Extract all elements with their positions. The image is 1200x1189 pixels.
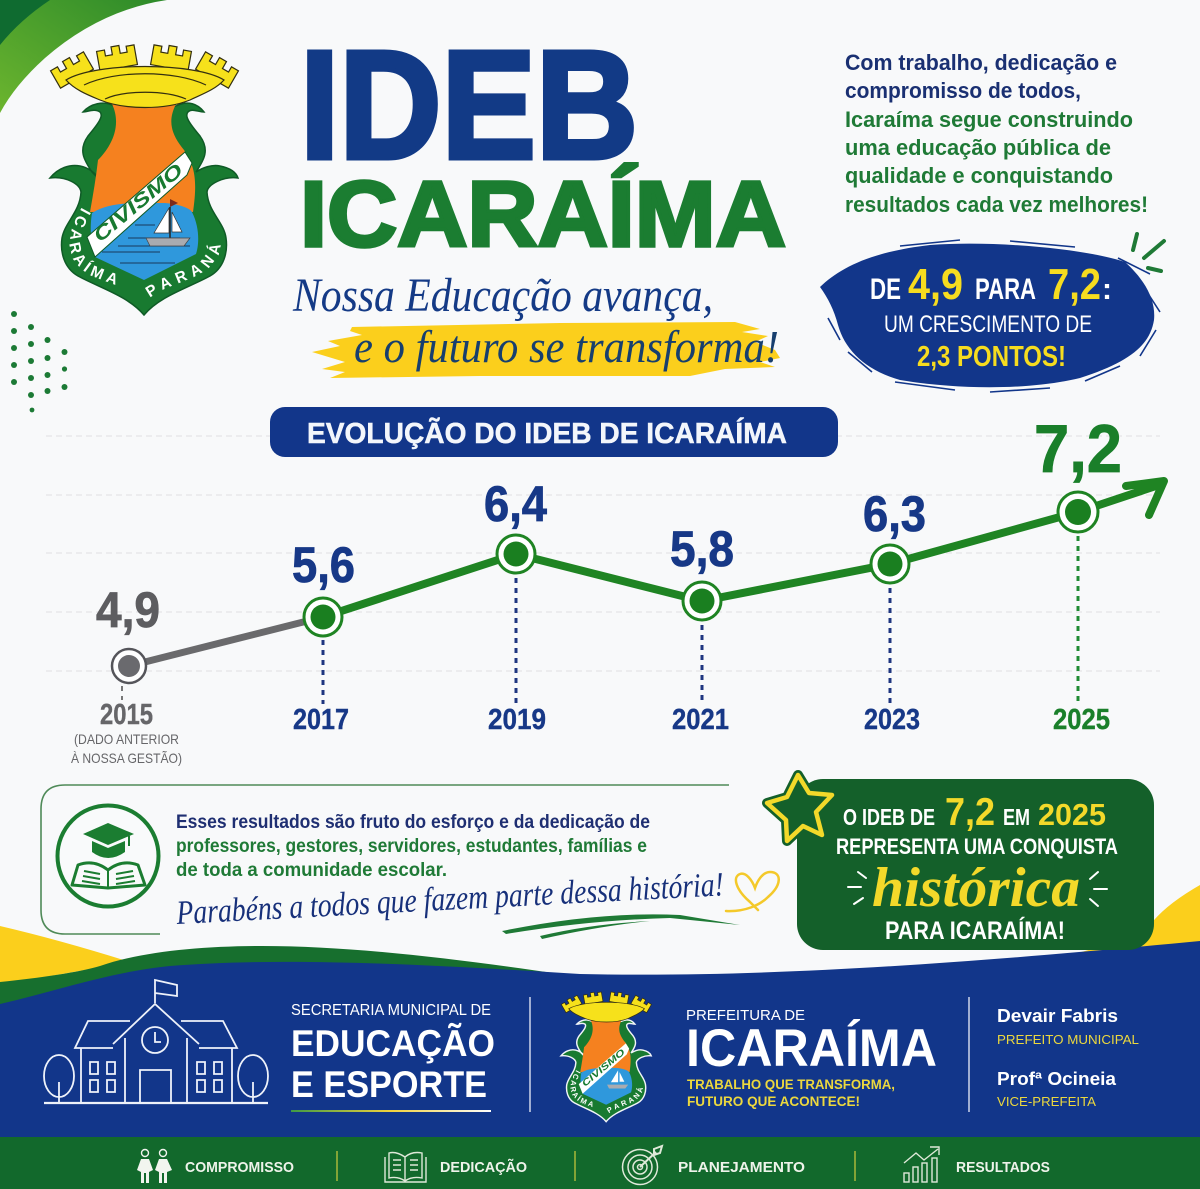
growth callout blob: 2,3 PONTOS! — [917, 341, 1066, 373]
callout accent rays — [1133, 234, 1164, 271]
growth callout blob: UM CRESCIMENTO DE — [884, 311, 1092, 338]
values bar — [0, 1137, 1200, 1189]
chart grid — [46, 436, 1160, 671]
growth callout blob — [820, 240, 1160, 392]
officials: VICE-PREFEITA — [997, 1094, 1096, 1109]
intro paragraph: uma educação pública de — [845, 135, 1111, 160]
message panel — [41, 785, 779, 939]
bottom yellow swooshes — [0, 885, 1200, 985]
year labels: 2019 — [488, 704, 546, 736]
2015 note — [71, 731, 182, 766]
title — [300, 19, 786, 266]
achievement text — [836, 791, 1118, 945]
congratulation script: Parabéns a todos que fazem parte dessa história! — [175, 866, 725, 932]
year labels: 2025 — [1053, 704, 1110, 736]
icon: target — [622, 1146, 662, 1184]
achievement text: EM — [1003, 804, 1030, 830]
year drop lines — [122, 536, 1078, 704]
prefecture name: TRABALHO QUE TRANSFORMA, — [687, 1077, 895, 1092]
line chart — [71, 411, 1164, 766]
officials: PREFEITO MUNICIPAL — [997, 1032, 1139, 1047]
decorative dot pattern — [11, 311, 68, 412]
icon: star — [767, 775, 832, 841]
message text: de toda a comunidade escolar. — [176, 860, 447, 881]
achievement text: O IDEB DE — [843, 804, 935, 830]
small crest: PARANÁ — [606, 1088, 643, 1113]
intro paragraph: qualidade e conquistando — [845, 163, 1113, 188]
year labels: 2017 — [293, 704, 349, 736]
crest ribbon name right — [150, 226, 221, 298]
value labels: 4,9 — [96, 582, 160, 638]
prefecture name: FUTURO QUE ACONTECE! — [687, 1094, 860, 1109]
2015 note: (DADO ANTERIOR — [74, 731, 179, 747]
intro paragraph — [845, 50, 1148, 217]
prefecture name: ICARAÍMA — [686, 1018, 937, 1078]
icon: open book — [385, 1152, 426, 1182]
message text — [176, 812, 650, 881]
label dedicacao: DEDICAÇÃO — [440, 1158, 527, 1176]
small crest — [559, 992, 652, 1123]
point 2019 — [497, 535, 535, 573]
value labels: 5,6 — [292, 537, 355, 593]
value labels: 7,2 — [1034, 411, 1122, 487]
title: IDEB — [300, 19, 638, 191]
label compromisso: COMPROMISSO — [185, 1159, 294, 1176]
value labels — [96, 411, 1122, 638]
label resultados: RESULTADOS — [956, 1159, 1050, 1176]
officials: Devair Fabris — [997, 1006, 1118, 1026]
intro paragraph: compromisso de todos, — [845, 78, 1081, 103]
growth callout blob: 4,9 — [908, 260, 963, 309]
brush underline — [502, 914, 740, 939]
data line before 2017 — [129, 617, 323, 666]
tagline with yellow brush: e o futuro se transforma! — [354, 322, 779, 372]
title: ICARAÍMA — [300, 162, 786, 266]
achievement text: 7,2 — [945, 791, 995, 834]
achievement panel — [767, 775, 1154, 950]
municipal crest: PARANÁ — [145, 244, 221, 298]
value labels: 6,4 — [484, 476, 547, 532]
icon: graduation cap and book — [58, 806, 158, 906]
growth callout blob: : — [1102, 273, 1112, 306]
intro paragraph: Icaraíma segue construindo — [845, 107, 1133, 132]
officials — [997, 1006, 1139, 1109]
tagline with yellow brush — [292, 269, 780, 378]
sparkle ticks — [848, 872, 1107, 906]
achievement text: PARA ICARAÍMA! — [885, 916, 1065, 945]
municipal crest — [48, 44, 240, 316]
year labels: 2015 — [100, 699, 153, 731]
icon: growth chart — [904, 1147, 939, 1182]
municipal crest: ICARAÍMA — [69, 208, 116, 285]
intro paragraph: Com trabalho, dedicação e — [845, 50, 1117, 75]
point 2017 — [304, 598, 342, 636]
school icon — [44, 980, 268, 1103]
intro paragraph: resultados cada vez melhores! — [845, 192, 1148, 217]
growth callout blob: DE — [870, 273, 901, 306]
small crest: CIVISMO — [580, 1047, 627, 1089]
value labels: 6,3 — [863, 486, 926, 542]
achievement text: histórica — [872, 857, 1080, 919]
growth callout blob: 7,2 — [1048, 260, 1101, 309]
chart heading — [270, 407, 838, 457]
point 2015 — [112, 649, 146, 683]
crest crown — [50, 43, 239, 107]
secretariat name: E ESPORTE — [291, 1064, 487, 1105]
tagline with yellow brush: Nossa Educação avança, — [292, 269, 713, 322]
crest ribbon name left — [70, 207, 140, 300]
footer dividers — [530, 997, 969, 1112]
2015 note: À NOSSA GESTÃO) — [71, 750, 182, 766]
point 2023 — [871, 545, 909, 583]
prefecture name — [686, 1008, 937, 1109]
year labels: 2023 — [864, 704, 920, 736]
officials: Profª Ocineia — [997, 1069, 1117, 1089]
point 2021 — [683, 582, 721, 620]
year labels — [100, 699, 1110, 736]
icon: heart — [726, 872, 779, 911]
prefecture name: PREFEITURA DE — [686, 1008, 805, 1024]
achievement text: REPRESENTA UMA CONQUISTA — [836, 834, 1118, 859]
secretariat name: SECRETARIA MUNICIPAL DE — [291, 1002, 491, 1019]
achievement text: 2025 — [1038, 797, 1106, 832]
icon: two people — [137, 1150, 172, 1183]
data line 2017 to 2025 with arrow — [323, 481, 1164, 617]
footer wave and blue band — [0, 941, 1200, 1140]
growth callout blob: PARA — [975, 273, 1036, 306]
chart heading: EVOLUÇÃO DO IDEB DE ICARAÍMA — [307, 416, 787, 450]
small crest: ICARAÍMA — [570, 1070, 592, 1108]
message text: professores, gestores, servidores, estudantes, famílias e — [176, 836, 647, 857]
crest motto: CIVISMO — [90, 160, 188, 247]
point 2025 — [1058, 492, 1098, 532]
message text: Esses resultados são fruto do esforço e da dedicação de — [176, 812, 650, 833]
secretariat name — [291, 1002, 495, 1112]
crest boat — [146, 199, 190, 246]
secretariat name: EDUCAÇÃO — [291, 1022, 495, 1064]
year labels: 2021 — [672, 704, 729, 736]
top-left corner swoosh — [0, 0, 167, 113]
label planejamento: PLANEJAMENTO — [678, 1159, 805, 1176]
value labels: 5,8 — [670, 521, 734, 577]
